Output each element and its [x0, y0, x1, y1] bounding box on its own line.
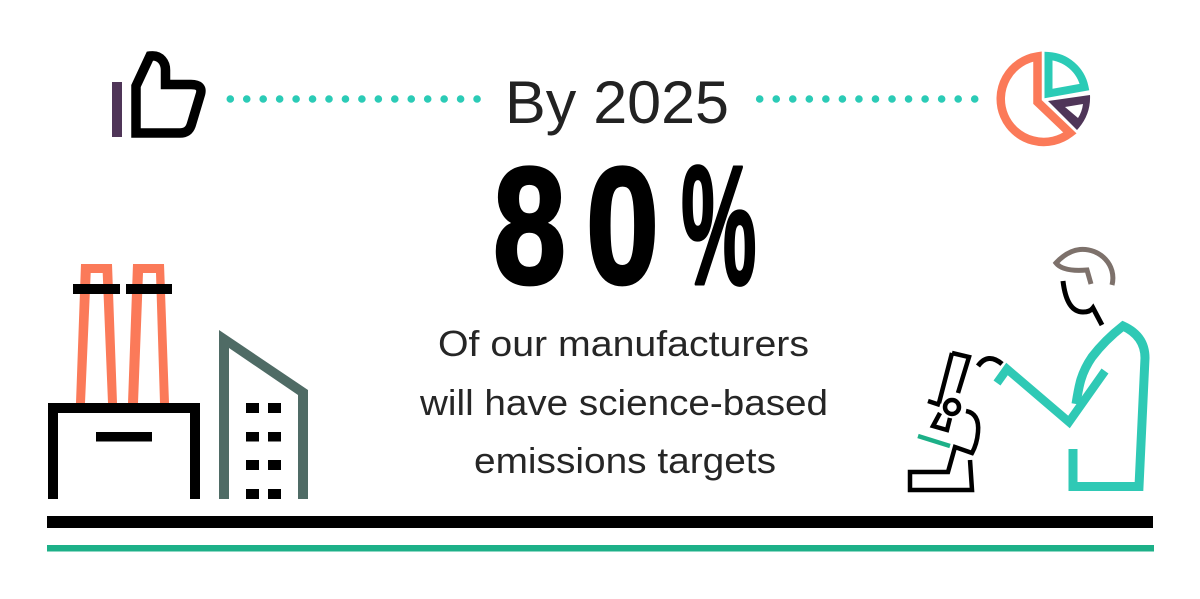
right dotted line	[760, 95, 976, 103]
big number: 80%	[493, 131, 757, 321]
icon: factory	[48, 264, 200, 499]
big number: 80%: %	[681, 131, 757, 321]
big number: 80%: 8	[493, 133, 566, 319]
text block: description: emissions targets	[474, 440, 776, 481]
heading: By 2025: By 2025	[505, 69, 729, 136]
icon: pie chart	[1001, 56, 1090, 142]
big number: 80%: 0	[586, 133, 659, 319]
green ground line	[47, 545, 1154, 552]
text block: description: Of our manufacturers	[438, 323, 809, 364]
text block: description	[419, 323, 828, 481]
black ground line	[47, 516, 1153, 528]
icon: office building	[219, 330, 308, 499]
icon: scientist with microscope	[910, 249, 1145, 490]
icon: thumbs up	[112, 56, 201, 137]
left dotted line	[230, 95, 478, 103]
text block: description: will have science-based	[419, 382, 828, 423]
